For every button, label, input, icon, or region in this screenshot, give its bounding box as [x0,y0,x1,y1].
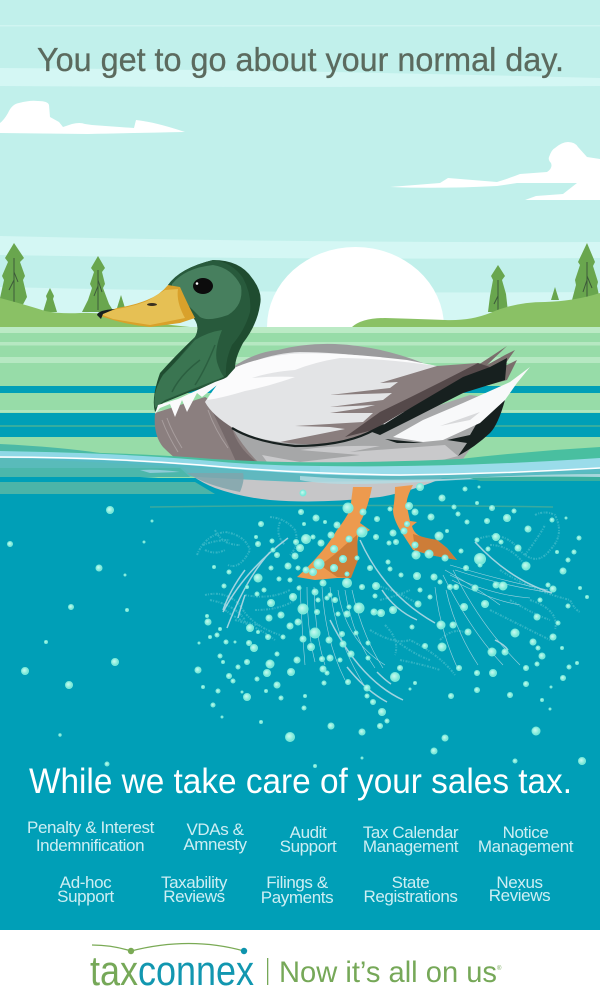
service: VDAs: Amnesty [183,835,248,854]
service: tax calendar: Management [363,837,459,856]
cloud left [0,101,185,134]
registered mark: ® [497,965,502,972]
service: notice: Notice [503,823,548,842]
service: penalty and interest: Indemnification [36,836,144,855]
service: taxability: Reviews [163,887,225,906]
heading: normal day: You get to go about your normal day. [37,41,564,78]
service: nexus: Reviews [489,886,550,905]
duck head highlight [172,265,241,319]
lake stripes [0,327,600,497]
service: notice: Management [478,837,574,856]
service: state registrations: Registrations [363,887,458,906]
duck back [233,344,423,375]
splash droplets [197,512,580,675]
duck black feathers [372,358,507,435]
logo divider [267,958,268,985]
service: ad-hoc: Support [57,887,115,906]
duck belly [232,395,505,466]
service: penalty and interest: Penalty & Interest [27,818,154,837]
tagline: Now it’s all on us [279,956,497,989]
service: filings: Filings & [266,873,328,892]
duck white tail feather [393,367,530,442]
duck collar [155,378,226,417]
duck eye [193,278,213,294]
duck beak [97,285,195,327]
duck black sliver [385,439,423,443]
sun [267,247,444,327]
services list [27,818,574,907]
trees left [0,243,125,312]
footer band [0,930,600,999]
duck wing black line [232,425,384,446]
underwater background [0,478,600,930]
duck dark band [345,363,490,437]
duck tail spikes [400,346,517,412]
duck foot left [297,487,372,580]
underwater ripple line [150,506,553,507]
service: VDAs: VDAs & [186,820,244,839]
duck wing [205,352,470,443]
service: ad-hoc: Ad-hoc [60,873,111,892]
duck head and neck [154,260,261,417]
duck wing dark feathers [280,363,478,444]
air bubbles [8,484,588,768]
service: audit: Support [280,837,337,856]
service: state registrations: State [392,873,429,892]
water surface [0,444,600,494]
water surface white line [0,457,600,475]
feather streaks [223,538,552,702]
duck foot right [393,485,457,560]
duck grey flank [155,397,262,466]
duck black under tail [447,400,505,456]
reflected duck belly under water [187,473,244,492]
duck wing white highlight [207,353,437,400]
service: taxability: Taxability [161,873,227,892]
service: audit: Audit [290,823,326,842]
duck underwater body [178,462,460,501]
taxconnex logo: taxconnex [90,947,254,994]
service: filings: Payments [261,888,333,907]
duck neck lighter green [154,330,224,408]
trees right [488,243,600,312]
hill left [0,298,190,327]
heading: sales tax: While we take care of your sales tax. [29,762,572,801]
service: tax calendar: Tax Calendar [363,823,458,842]
hill right [352,293,600,327]
cloud right [390,142,600,200]
sky background [0,0,600,330]
duck body [155,344,530,466]
service: nexus: Nexus [496,873,543,892]
